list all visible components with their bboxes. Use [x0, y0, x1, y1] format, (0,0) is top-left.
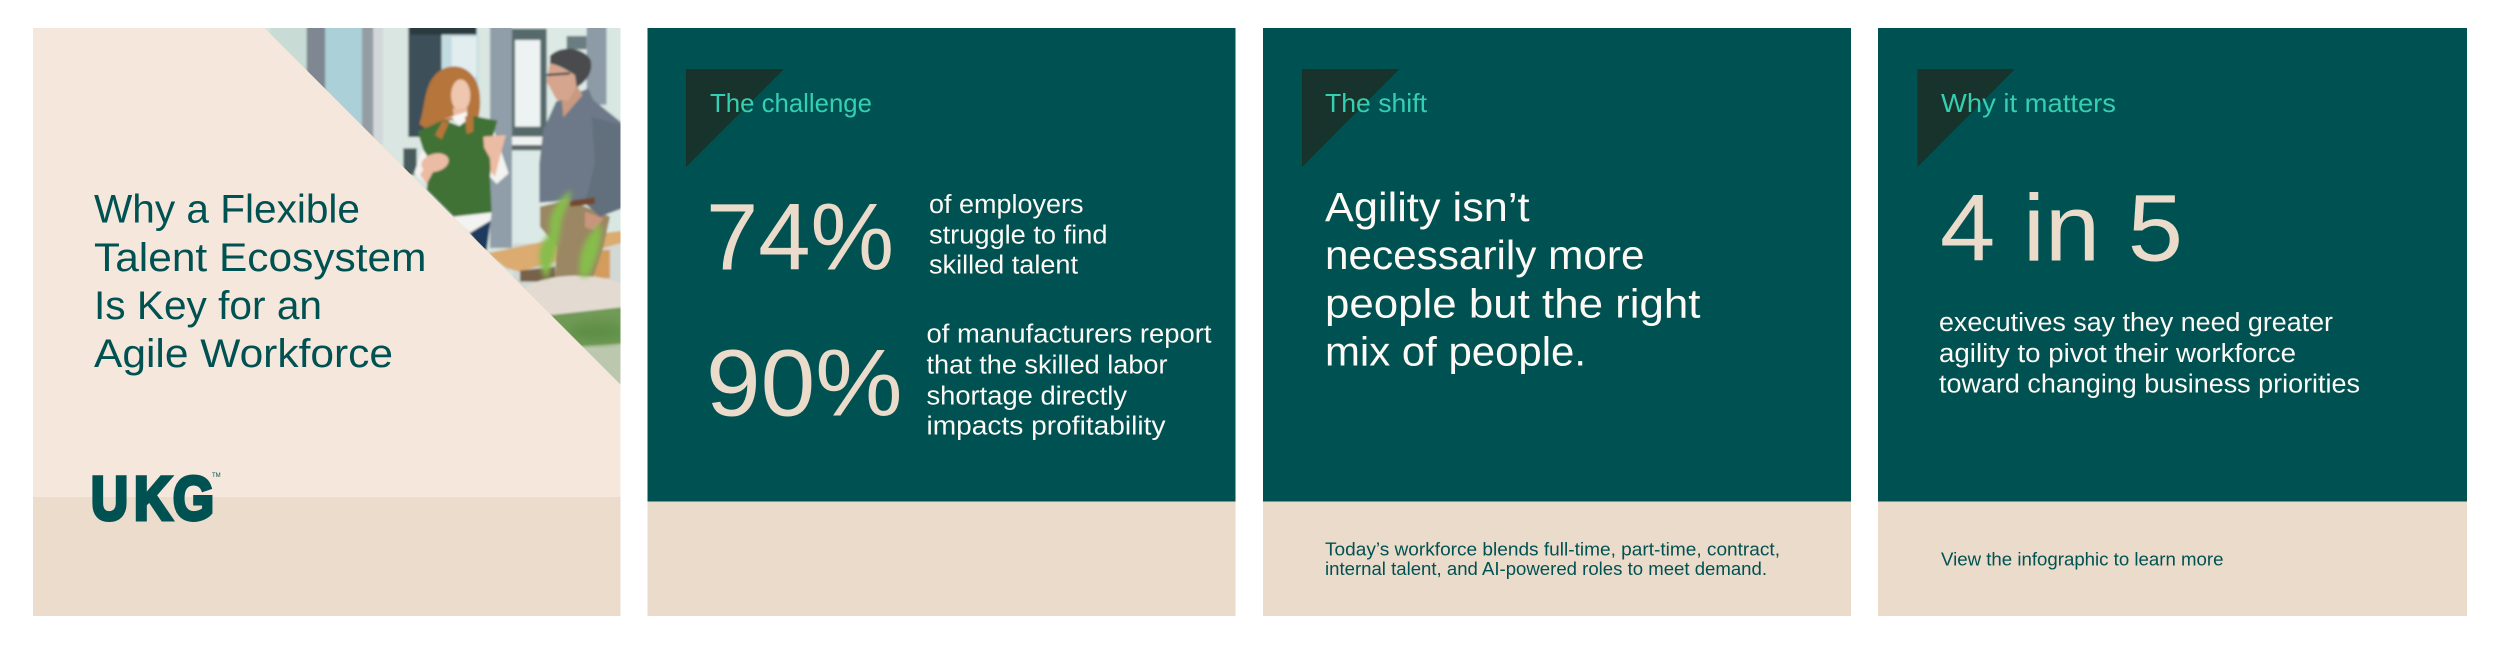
logo: UKG: G [173, 464, 214, 532]
logo: UKG: TM [212, 473, 221, 479]
stat text: employers [929, 191, 1108, 280]
statement: necessarily more [1325, 232, 1644, 278]
planter and foliage [520, 297, 630, 390]
stat: 4 in 5: 4 in 5 [1940, 176, 2183, 282]
decorative corner triangle [686, 69, 784, 167]
stat text: employers: of employers [929, 191, 1084, 219]
footer text: internal talent, and AI-powered roles to meet demand. [1325, 559, 1767, 579]
decorative corner triangle [1918, 69, 2015, 167]
panel: the challenge [648, 28, 1236, 616]
panel: title card [33, 20, 635, 616]
woman [469, 220, 491, 251]
stat text [1939, 309, 2360, 398]
stat text: manufacturers: shortage directly [926, 382, 1127, 410]
stat text: employers: skilled talent [929, 252, 1078, 280]
stat text: manufacturers: that the skilled labor [926, 352, 1168, 380]
stat: 90%: 90% [706, 330, 902, 436]
statement: Agility isn’t [1325, 184, 1530, 230]
title: Agile Workforce [94, 332, 393, 376]
footer text: Today’s workforce blends full-time, part-time, contract, [1325, 540, 1780, 560]
decorative corner triangle [1302, 69, 1400, 167]
panel: the shift [1263, 28, 1851, 616]
stat text: manufacturers [926, 320, 1212, 440]
photo: two colleagues talking in an office [264, 28, 620, 384]
label: Why it matters: Why it matters [1941, 88, 2116, 118]
stat text: manufacturers: impacts profitability [926, 412, 1166, 440]
title: Talent Ecosystem [94, 236, 426, 280]
panel: why it matters [1878, 28, 2467, 616]
footer text: View the infographic to learn more [1941, 550, 2224, 570]
stat text: agility to pivot their workforce [1939, 340, 2296, 368]
bench [487, 230, 627, 272]
logo: UKG: K [134, 464, 172, 532]
stat text: executives say they need greater [1939, 309, 2334, 337]
statement: mix of people. [1325, 328, 1586, 374]
title: Why a Flexible [94, 188, 360, 232]
label: The shift: The shift [1325, 88, 1428, 118]
logo: UKG [91, 464, 221, 532]
stat: 74%: 74% [706, 184, 894, 290]
man [540, 200, 610, 277]
logo: UKG: U [91, 464, 128, 532]
footer text [1325, 540, 1780, 579]
label: The challenge: The challenge [710, 88, 872, 118]
statement [1325, 184, 1700, 374]
stat text: manufacturers: of manufacturers report [926, 320, 1212, 348]
stat text: employers: struggle to find [929, 222, 1108, 250]
statement: people but the right [1325, 280, 1700, 326]
title [94, 188, 426, 376]
stat text: toward changing business priorities [1939, 370, 2360, 398]
title: Is Key for an [94, 284, 322, 328]
